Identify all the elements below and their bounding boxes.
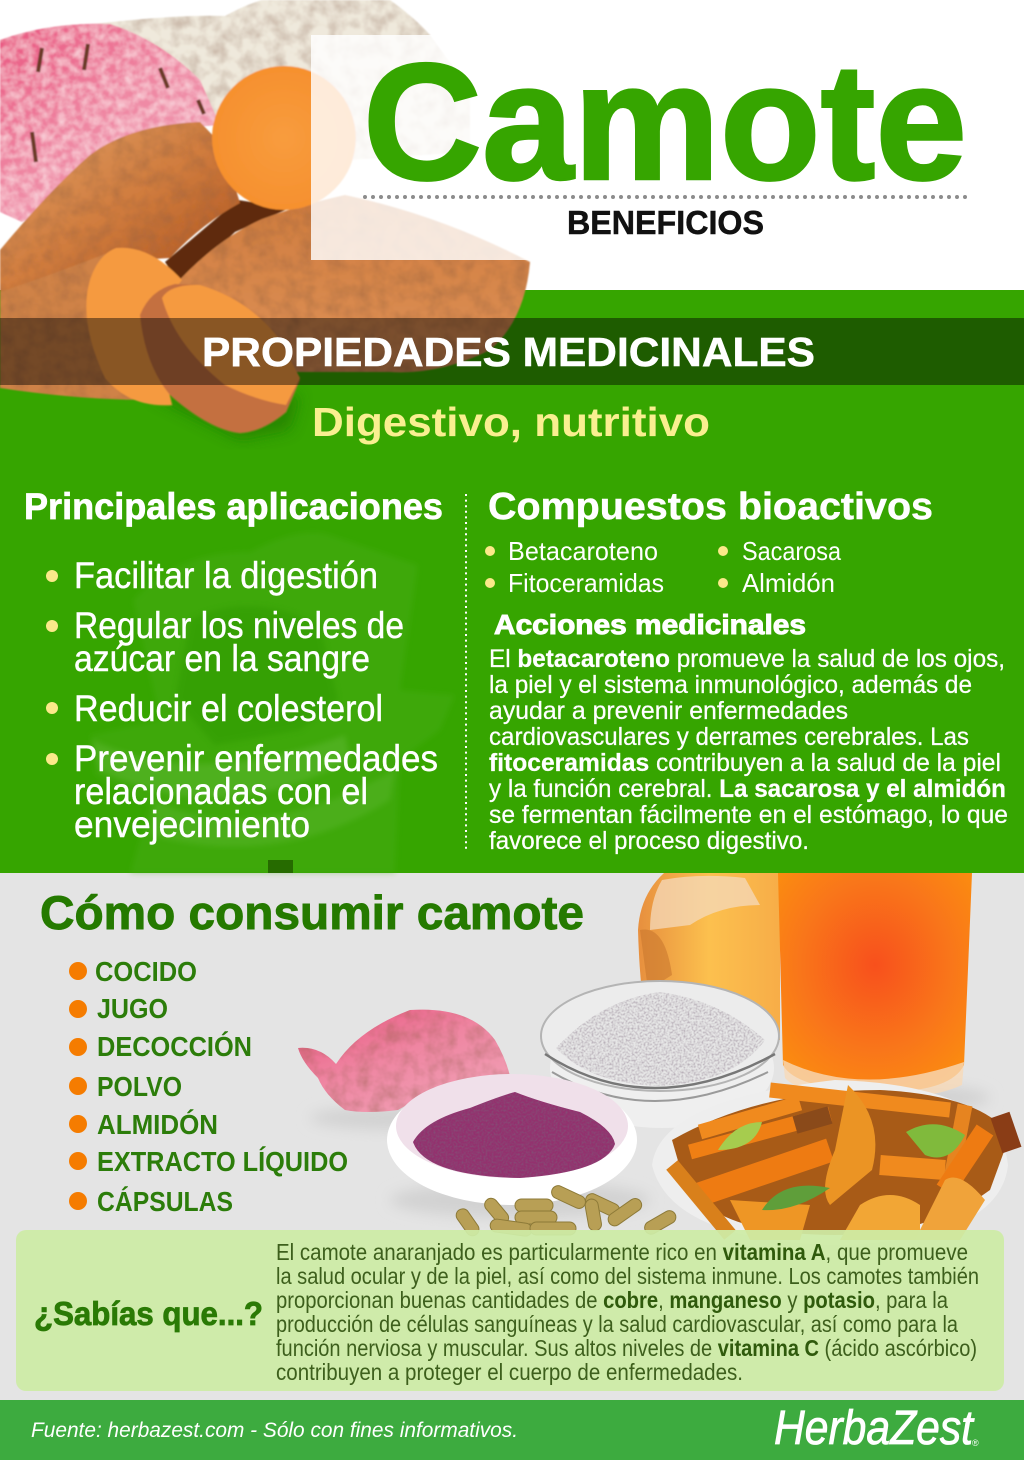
- image: middle sweet potato: [0, 122, 240, 292]
- text block: sabías que: proporcionan buenas cantidades de cobre, manganeso y potasio, para la: [276, 1287, 948, 1313]
- source note: Fuente: herbazest.com - Sólo con fines informativos.: [31, 1419, 518, 1442]
- registered mark: ®: [972, 1438, 979, 1448]
- dotted divider: title: [365, 195, 968, 199]
- image: dark gap behind potatoes: [165, 200, 290, 285]
- shadow under potatoes: [150, 395, 300, 440]
- icon: basil leaves: [718, 1122, 965, 1210]
- image: pink sweet potato: [298, 1010, 512, 1112]
- compound list: Fitoceramidas: [508, 568, 664, 598]
- text block: acciones: El betacaroteno promueve la salud de los ojos,: [489, 645, 1005, 673]
- bullet list: Regular los niveles de: [74, 605, 404, 646]
- title: Camote: [363, 30, 967, 215]
- heading: compuestos bioactivos: Compuestos bioactivos: [488, 486, 933, 528]
- list: cómo consumir: JUGO: [97, 993, 168, 1024]
- heading: acciones medicinales: Acciones medicinales: [494, 609, 806, 640]
- shadow: products on grey: [310, 1084, 990, 1218]
- heading: principales aplicaciones: Principales aplicaciones: [24, 486, 443, 527]
- image: pale sweet potato: [60, 0, 470, 160]
- bullet list: envejecimiento: [74, 804, 310, 845]
- list: cómo consumir: COCIDO: [95, 956, 197, 987]
- dark band: [0, 318, 1024, 385]
- image: round cut slice: [212, 66, 356, 210]
- image: cut sweet potato: [0, 252, 185, 400]
- text block: sabías que: [276, 1239, 979, 1385]
- panel: sabías que: [16, 1230, 1004, 1391]
- heading: sabías que: ¿Sabías que...?: [34, 1295, 263, 1332]
- list: cómo consumir: CÁPSULAS: [97, 1186, 233, 1217]
- image: sweet potato pile: [0, 0, 530, 440]
- bullet list: [46, 555, 438, 845]
- compound list: Betacaroteno: [508, 536, 658, 566]
- text block: sabías que: El camote anaranjado es particularmente rico en vitamina A, que promueve: [276, 1239, 968, 1265]
- compound list: Sacarosa: [742, 536, 841, 566]
- compound list: [485, 536, 841, 598]
- text block: acciones: [489, 645, 1008, 855]
- image: purple powder bowl: [387, 1074, 637, 1205]
- text block: sabías que: contribuyen a proteger el cuerpo de enfermedades.: [276, 1359, 743, 1385]
- panel: principales aplicaciones: [24, 486, 443, 845]
- panel: green medicinal section: [0, 290, 1024, 873]
- list: cómo consumir: EXTRACTO LÍQUIDO: [97, 1146, 348, 1177]
- bullet list: relacionadas con el: [74, 771, 368, 812]
- list: cómo consumir: DECOCCIÓN: [97, 1031, 252, 1062]
- image: pink sweet potato: [0, 24, 220, 222]
- panel: grey consumption section: [0, 873, 1024, 1400]
- image: bowl of sweet potato fries: [652, 1080, 1012, 1245]
- image: faded woman silhouette: [90, 532, 455, 873]
- image: oval slice: [140, 284, 300, 433]
- text block: acciones: fitoceramidas contribuyen a la salud de la piel: [489, 749, 1001, 777]
- bullet list: Prevenir enfermedades: [74, 738, 438, 779]
- bullet list: Facilitar la digestión: [74, 555, 378, 596]
- subtitle: BENEFICIOS: [567, 204, 764, 241]
- dotted divider: columns: [465, 494, 467, 850]
- text block: acciones: cardiovasculares y derrames cerebrales. Las: [489, 723, 969, 751]
- image: orange juice glass: [778, 873, 972, 1098]
- list: cómo consumir: POLVO: [97, 1071, 182, 1102]
- image: capsules: [454, 1184, 678, 1238]
- image: large sweet potato: [172, 195, 530, 372]
- text block: acciones: y la función cerebral. La sacarosa y el almidón: [489, 775, 1006, 803]
- compound list: Almidón: [742, 568, 835, 598]
- text block: acciones: ayudar a prevenir enfermedades: [489, 697, 848, 725]
- text block: acciones: la piel y el sistema inmunológico, además de: [489, 671, 972, 699]
- list: cómo consumir: ALMIDÓN: [97, 1109, 218, 1140]
- background: white header: [0, 0, 1024, 290]
- heading: cómo consumir camote: Cómo consumir camote: [40, 886, 584, 939]
- subheading: properties: Digestivo, nutritivo: [312, 399, 710, 445]
- bullet list: Reducir el colesterol: [74, 688, 383, 729]
- logo: HerbaZest: HerbaZest: [774, 1402, 974, 1455]
- list: cómo consumir: [69, 956, 348, 1217]
- image: white powder bowl: [541, 981, 779, 1128]
- panel: compuestos bioactivos: [485, 486, 1008, 855]
- header overlay rectangle: [311, 35, 1024, 260]
- text block: acciones: favorece el proceso digestivo.: [489, 827, 809, 855]
- text block: acciones: se fermentan fácilmente en el estómago, lo que: [489, 801, 1008, 829]
- text block: sabías que: función nerviosa y muscular. Sus altos niveles de vitamina C (ácido ascórbico): [276, 1335, 977, 1361]
- heading: propiedades medicinales: PROPIEDADES MEDICINALES: [202, 329, 815, 375]
- footer: [0, 1400, 1024, 1460]
- bullet list: azúcar en la sangre: [74, 638, 370, 679]
- image: amber liquid jar: [638, 873, 780, 1040]
